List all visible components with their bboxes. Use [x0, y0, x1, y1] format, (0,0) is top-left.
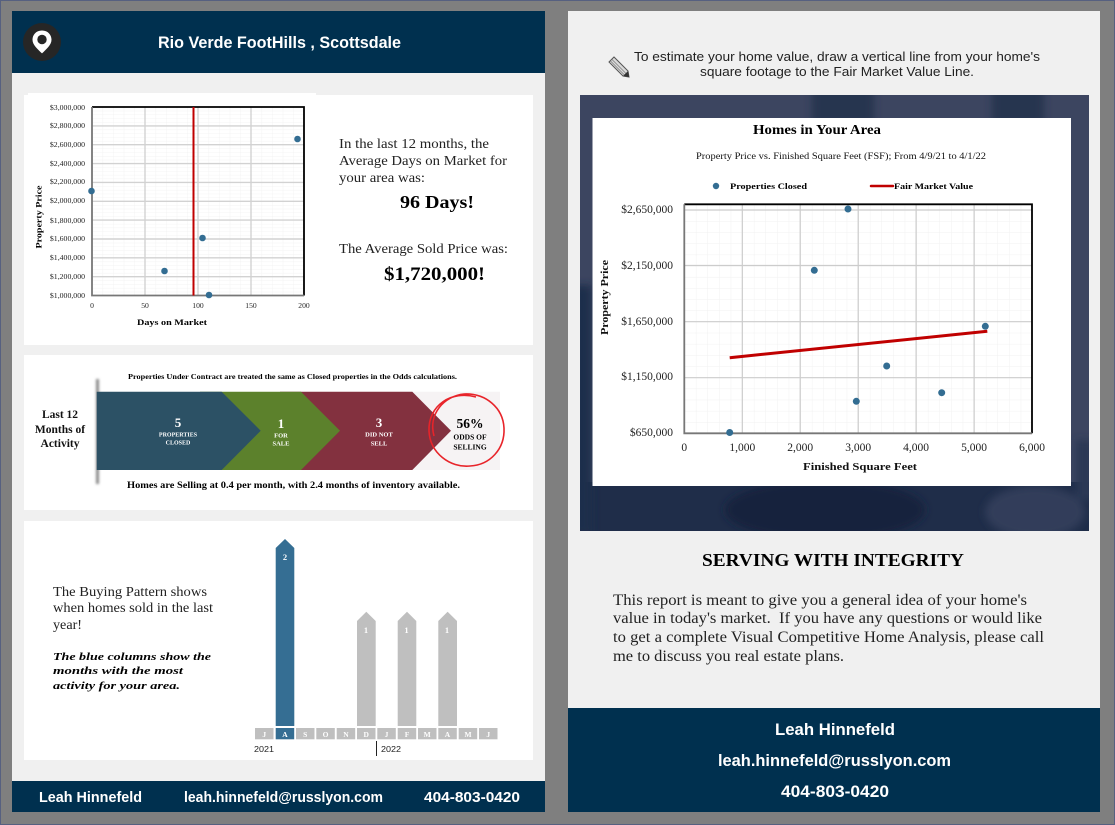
chart: sales by month: S [303, 730, 307, 739]
chart: price vs days on market [34, 103, 310, 327]
chart: sales by month: 1 [364, 625, 368, 635]
chart: sales by month: J [486, 730, 490, 739]
text: blue columns note: months with the most [53, 666, 185, 677]
footer: contact [568, 708, 1100, 812]
chart: price vs days on market: $2,200,000 [50, 177, 85, 186]
footer: contact: Leah Hinnefeld [775, 721, 895, 739]
text: report disclaimer [613, 592, 1044, 665]
instructions: To estimate your home value, draw a vertical line from your home's [634, 50, 1040, 64]
text: report disclaimer: This report is meant to give you a general idea of your home's [613, 592, 1027, 609]
panel: buying pattern [24, 521, 533, 760]
chart: price vs days on market: $3,000,000 [50, 103, 85, 112]
chart: price vs days on market: $1,200,000 [50, 272, 85, 281]
chart: sales by month: F [405, 730, 410, 739]
chart: price vs square feet: 0 [681, 442, 687, 454]
footer bar: contact: leah.hinnefeld@russlyon.com [184, 789, 383, 806]
chart: price vs days on market: 200 [298, 301, 310, 310]
chart: sales by month: J [385, 730, 389, 739]
footer bar: contact: Leah Hinnefeld [39, 789, 142, 806]
icon: location pin [23, 23, 61, 61]
panel: background photo [570, 85, 1100, 542]
chart: price vs days on market: 50 [141, 301, 149, 310]
instructions [634, 50, 1040, 79]
icon: hand drawn circle [429, 394, 504, 466]
stat: for sale [273, 416, 289, 448]
stat: for sale: FOR [274, 432, 288, 440]
chart: price vs days on market: Property Price [34, 185, 44, 248]
chevron flow [96, 379, 504, 484]
text: buying pattern: year! [53, 618, 82, 633]
label: last 12 months: Activity [41, 438, 80, 450]
chart: price vs days on market: $2,400,000 [50, 159, 85, 168]
stat: properties closed: CLOSED [166, 440, 191, 446]
stat: for sale: 1 [278, 416, 284, 431]
chart: price vs days on market: $2,800,000 [50, 121, 85, 130]
chart: sales by month: J [262, 730, 266, 739]
chart: price vs square feet: 2,000 [787, 442, 813, 454]
chart: price vs days on market: $1,400,000 [50, 253, 85, 262]
text: average days on market: In the last 12 months, the [339, 137, 489, 152]
stat: properties closed: PROPERTIES [159, 432, 198, 438]
legend [713, 181, 973, 191]
footer bar: contact [12, 781, 545, 812]
chart: price vs days on market: $2,000,000 [50, 196, 85, 205]
chart: price vs square feet: Finished Square Feet [803, 461, 917, 473]
chart: sales by month: M [424, 730, 431, 739]
icon: pencil [609, 57, 629, 77]
chart: sales by month: 2021 [254, 745, 275, 754]
chart: sales by month [254, 539, 498, 756]
stat: did not sell: 3 [376, 415, 383, 430]
chart: price vs square feet: $2,150,000 [621, 259, 673, 272]
text: average days on market: $1,720,000! [384, 264, 485, 285]
text: average days on market: 96 Days! [400, 192, 474, 212]
chart: price vs square feet: $2,650,000 [621, 203, 673, 216]
panel: right page [568, 11, 1100, 812]
stat: odds of selling: SELLING [453, 442, 487, 452]
header bar [12, 11, 545, 73]
stat: for sale: SALE [273, 440, 289, 448]
text: blue columns note: The blue columns show the [53, 652, 211, 663]
panel: days on market [24, 93, 533, 345]
chart: sales by month: M [464, 730, 472, 739]
text: report disclaimer: to get a complete Visual Competitive Home Analysis, please call [613, 629, 1044, 646]
label: last 12 months [35, 409, 85, 450]
chart: price vs days on market: 0 [90, 301, 94, 310]
instructions: square footage to the Fair Market Value Line. [700, 65, 974, 79]
text: report disclaimer: me to discuss you real estate plans. [613, 648, 844, 665]
panel: odds of selling [24, 355, 533, 510]
chart: price vs square feet: Property Price [599, 260, 611, 335]
text: buying pattern: when homes sold in the last [53, 601, 213, 616]
footer: contact: leah.hinnefeld@russlyon.com [718, 752, 951, 770]
chart: sales by month: 1 [404, 625, 409, 635]
text: report disclaimer: value in today's market. If you have any questions or would like [613, 610, 1042, 627]
chart: sales by month: 2 [283, 552, 287, 562]
chart: price vs days on market: 100 [192, 301, 204, 310]
chart: price vs square feet: 4,000 [903, 442, 929, 454]
chart subtitle: Property Price vs. Finished Square Feet (FSF); From 4/9/21 to 4/1/22 [696, 151, 986, 161]
stat: odds of selling: ODDS OF [453, 432, 487, 442]
chart: sales by month: N [343, 730, 349, 739]
stat: odds of selling [453, 416, 487, 452]
chart: sales by month: D [363, 730, 369, 739]
text: average days on market [339, 137, 508, 285]
stat: properties closed [159, 415, 198, 446]
chart: price vs square feet [599, 203, 1045, 473]
panel: left page [12, 11, 545, 812]
chart: price vs days on market: $1,600,000 [50, 234, 85, 243]
chart: price vs days on market: $1,000,000 [50, 291, 85, 300]
text: blue columns note: activity for your area. [53, 681, 180, 692]
chart: price vs days on market: $1,800,000 [50, 216, 85, 225]
text: blue columns note [53, 652, 211, 692]
stat: did not sell: DID NOT [365, 432, 393, 438]
chart: price vs square feet: $1,150,000 [621, 370, 673, 383]
footer: contact: 404-803-0420 [781, 783, 889, 801]
note: homes selling rate: Homes are Selling at 0.4 per month, with 2.4 months of inventory available. [127, 481, 460, 491]
panel: scatter chart [592, 118, 1071, 486]
chart: sales by month: A [282, 730, 288, 739]
footer bar: contact: 404-803-0420 [424, 789, 520, 806]
label: last 12 months: Months of [35, 424, 85, 436]
chart: price vs square feet: 6,000 [1019, 442, 1045, 454]
title: Rio Verde FootHills , Scottsdale [158, 33, 401, 52]
chart: sales by month: 2022 [381, 745, 402, 754]
chart: price vs square feet: $650,000 [630, 426, 673, 439]
stat: did not sell: SELL [371, 440, 388, 448]
stat: did not sell [365, 415, 393, 448]
note: under contract: Properties Under Contract are treated the same as Closed properties in the Odds calculations. [128, 372, 457, 381]
chart: price vs square feet: 3,000 [845, 442, 871, 454]
label: last 12 months: Last 12 [42, 409, 78, 421]
chart: sales by month: O [323, 730, 329, 739]
chart: price vs square feet: 1,000 [729, 442, 755, 454]
chart title: Homes in Your Area [753, 123, 881, 138]
chart: price vs days on market: $2,600,000 [50, 140, 85, 149]
chart: price vs days on market: Days on Market [137, 317, 207, 327]
text: buying pattern: The Buying Pattern shows [53, 585, 207, 600]
text: average days on market: your area was: [339, 171, 425, 186]
stat: odds of selling: 56% [456, 416, 484, 431]
chart: sales by month: 1 [445, 625, 449, 635]
heading: serving with integrity: SERVING WITH INTEGRITY [702, 550, 964, 570]
text: average days on market: The Average Sold Price was: [339, 242, 508, 257]
chart: price vs square feet: $1,650,000 [621, 315, 673, 328]
legend: Fair Market Value [894, 181, 973, 191]
chart: sales by month: A [445, 730, 451, 739]
text: average days on market: Average Days on Market for [339, 154, 507, 169]
stat: properties closed: 5 [175, 415, 182, 430]
chart: price vs square feet: 5,000 [961, 442, 987, 454]
text: buying pattern [53, 585, 213, 633]
chart: price vs days on market: 150 [245, 301, 257, 310]
legend: Properties Closed [730, 181, 807, 191]
